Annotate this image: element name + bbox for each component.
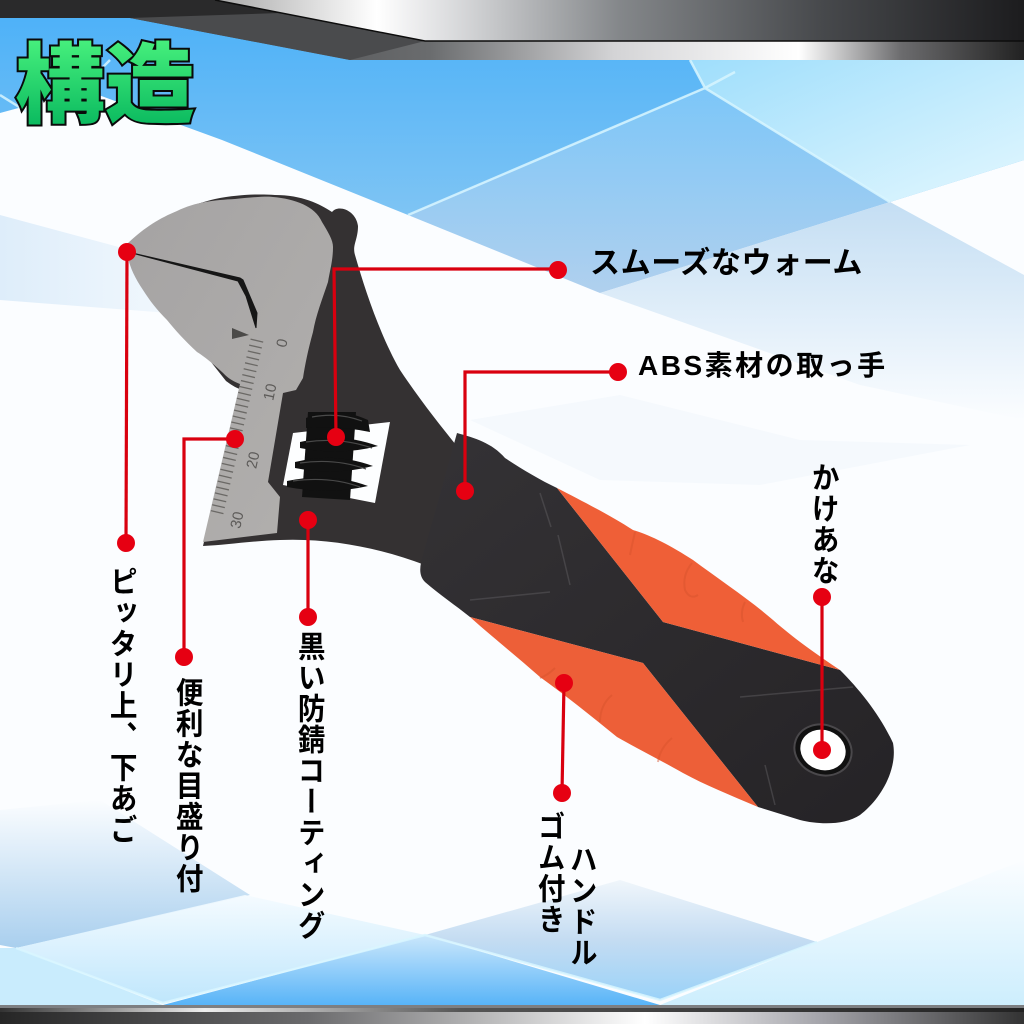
scale numbers — [227, 337, 292, 530]
worm screw — [287, 412, 378, 500]
bottom metallic bar — [0, 1005, 1024, 1024]
scale ticks — [216, 340, 257, 517]
hang hole — [787, 717, 859, 783]
slider window — [283, 422, 390, 503]
label: rubber handle line 1: ハンドル — [565, 844, 596, 968]
silver jaw face — [128, 197, 333, 542]
label: smooth worm: スムーズなウォーム — [590, 247, 863, 280]
wrench illustration — [128, 194, 894, 823]
handle orange grip lower — [470, 617, 758, 807]
scale numbers: 10 — [260, 382, 281, 402]
grip ridges — [540, 532, 745, 762]
scale numbers: 20 — [243, 450, 264, 470]
title: 構造 — [15, 36, 195, 135]
label: ABS handle: ABS素材の取っ手 — [638, 350, 888, 381]
label: jaws: ピッタリ上、下あご — [105, 566, 136, 845]
handle highlights — [470, 493, 853, 805]
label: scale: 便利な目盛り付 — [171, 677, 202, 894]
wrench steel body — [128, 194, 456, 565]
callout lines and dots — [117, 243, 831, 802]
handle core — [420, 433, 894, 823]
handle orange grip upper — [557, 488, 840, 670]
label: hang hole: かけあな — [807, 462, 838, 586]
triangle marker — [232, 328, 249, 339]
scale numbers: 30 — [227, 510, 248, 530]
scale numbers: 0 — [273, 337, 292, 349]
jaw gap — [128, 252, 257, 328]
label: rubber handle line 2: ゴム付き — [533, 811, 564, 935]
top metallic bar — [0, 0, 1024, 60]
worm highlights — [293, 415, 372, 487]
label: coating: 黒い防錆コーティング — [293, 631, 324, 941]
